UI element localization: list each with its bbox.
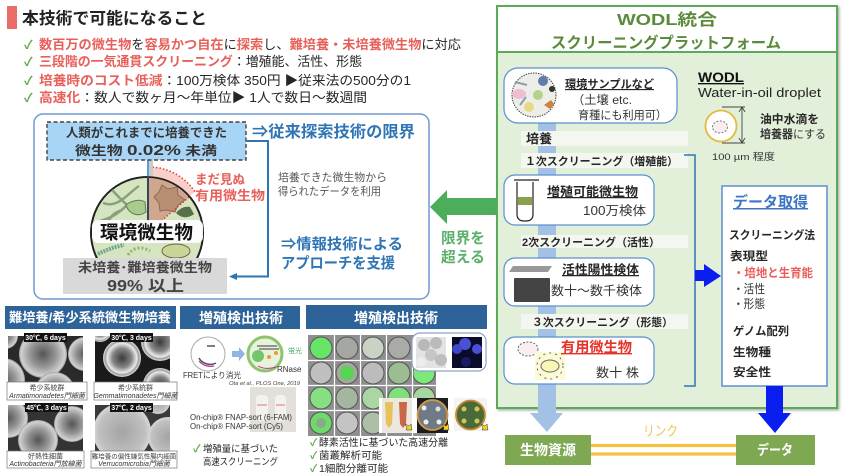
box: WODL definition: 培養器にする <box>760 127 826 141</box>
step label: culture: 培養 <box>526 131 553 146</box>
images: droplets bright field and fluorescence <box>412 333 486 371</box>
step label: primary screening: １次スクリーニング（増殖能） <box>525 154 678 168</box>
heading: limits of conventional technology: ⇒従来探索技術の限界 <box>252 122 415 141</box>
box: environmental samples: 育種にも利用可） <box>578 108 667 122</box>
arrow: flow to data <box>758 386 791 433</box>
photo: Verrucomicrobia colonies: 難培養の偏性嫌気性腸内細菌 <box>92 452 177 460</box>
heading: what this technology enables: 本技術で可能になること <box>22 8 207 28</box>
text block: growth-based screening: ✓ <box>193 443 201 455</box>
box: data acquisition: 生物種 <box>733 345 772 359</box>
arrow: data feedback loop <box>229 141 268 280</box>
arrow: flow to bio-resources <box>530 408 563 432</box>
text block: growth-based screening: 増殖量に基づいた <box>203 443 278 455</box>
box: data acquisition: 安全性 <box>733 365 772 379</box>
box: WODL definition: WODL <box>698 70 744 85</box>
connector line from cultured box to circle <box>148 160 153 222</box>
box: bio-resources: 生物資源 <box>520 442 576 458</box>
illustration: environmental microbes circle <box>90 166 204 258</box>
photo: Actinobacteria colonies: 好熱性細菌 <box>28 452 63 460</box>
photo: Gemmatimonadetes colonies: 30℃, 3 days <box>111 334 152 342</box>
photo: FNAP-sort reagent tubes: On-chip® FNAP-sort (Cy5) <box>190 422 283 431</box>
text block: enzyme activity separation features <box>310 436 448 473</box>
diagram: FRET probe quenching and RNase: Ota et al., PLOS One, 2019 <box>229 381 300 387</box>
box: data acquisition <box>722 186 827 386</box>
box: data acquisition: ゲノム配列 <box>733 324 789 338</box>
bracket: screening results to data <box>684 155 695 386</box>
callout: cultured microbes under 0.02%: 人類がこれまでに培養できた <box>66 125 227 140</box>
diagram: FRET probe quenching and RNase: RNase <box>277 365 302 374</box>
box: bio-resources <box>505 435 591 465</box>
text block: benefit checklist: 三段階の一気通貫スクリーニング：増殖能、活性、形態 <box>39 54 362 69</box>
callout: unseen useful microbes <box>195 172 265 203</box>
text block: benefit checklist: 培養時のコスト低減 ：100万検体 350円 ▶従来法の500分の1 <box>39 73 411 88</box>
box: data acquisition: 表現型 <box>730 249 768 263</box>
text block: growth-based screening: 高速スクリーニング <box>203 456 278 468</box>
photo: Gemmatimonadetes colonies <box>94 333 178 400</box>
callout: uncultured microbes 99%: 未培養･難培養微生物 <box>78 260 212 275</box>
box: activity-positive samples: 活性陽性検体 <box>562 262 639 277</box>
box: proliferating microbes: 100万検体 <box>583 204 647 218</box>
box: WODL definition: 油中水滴を <box>760 112 819 126</box>
callout: cultured microbes under 0.02% <box>47 122 246 160</box>
photo: Armatimonadetes colonies <box>6 333 88 400</box>
box: data: データ <box>757 442 793 458</box>
photo: Gemmatimonadetes colonies: 希少系統群 <box>118 383 153 392</box>
heading: supported by information technology <box>281 235 403 272</box>
box: data acquisition: ・活性 <box>733 282 765 296</box>
photo: FNAP-sort reagent tubes: On-chip® FNAP-sort (6-FAM) <box>190 413 292 422</box>
image grid: droplet fluorescence microscopy <box>308 335 436 436</box>
box: useful microbes: 有用微生物 <box>561 339 632 355</box>
text block: growth-based screening <box>193 443 278 468</box>
heading: platform title <box>551 11 781 52</box>
heading: platform title: スクリーニングプラットフォーム <box>551 33 781 52</box>
photo: Armatimonadetes colonies: 30℃, 6 days <box>25 334 66 342</box>
callout: cultured microbes under 0.02%: 微生物 0.02% 未満 <box>75 142 218 159</box>
box: data acquisition: データ取得 <box>733 193 808 211</box>
box: data acquisition: スクリーニング法 <box>729 228 815 242</box>
box: activity-positive samples: 数十～数千検体 <box>551 283 643 298</box>
panel: limits of conventional exploration <box>34 114 429 299</box>
box: data acquisition: ・培地と生育能 <box>733 265 813 280</box>
box: useful microbes: 数十 株 <box>596 365 640 380</box>
text block: enzyme activity separation features: 酵素活性に基づいた高速分離 <box>319 436 448 449</box>
diagram: FRET probe quenching and RNase: FRETにより消光 <box>183 370 241 380</box>
box: activity-positive samples <box>504 258 654 306</box>
photo: Actinobacteria colonies: 45℃, 3 days <box>26 404 67 412</box>
heading: supported by information technology: ⇒情報技術による <box>281 235 403 253</box>
heading bar: growth detection <box>180 306 300 329</box>
photo: Verrucomicrobia colonies: 37℃, 2 days <box>111 404 152 412</box>
box: useful microbes <box>504 337 654 384</box>
box: WODL definition: 100 µm 程度 <box>712 151 776 163</box>
photo: Armatimonadetes colonies: Armatimonadetes門細菌 <box>8 392 86 400</box>
photo: Gemmatimonadetes colonies: Gemmatimonadetes門細菌 <box>93 392 179 400</box>
text block: benefit checklist: ✓ <box>24 91 33 105</box>
text block: benefit checklist <box>24 37 461 105</box>
text block: enzyme activity separation features: 菌叢解析可能 <box>319 449 382 462</box>
callout: uncultured microbes 99% <box>63 258 227 295</box>
diagram: FRET probe quenching and RNase <box>183 337 302 387</box>
link lines between resources and data <box>591 423 736 454</box>
box: environmental samples: （土壌 etc. <box>572 93 632 107</box>
callout: uncultured microbes 99%: 99% 以上 <box>107 277 184 295</box>
box: data acquisition: ・形態 <box>733 297 765 311</box>
text block: benefit checklist: ✓ <box>24 55 33 69</box>
photo: Verrucomicrobia colonies: Verrucomicrobia門細菌 <box>98 460 171 468</box>
photo: Armatimonadetes colonies: 希少系統群 <box>30 383 64 392</box>
panel: WODL integrated screening platform <box>497 6 837 408</box>
text block: using data from cultured microbes <box>278 170 387 198</box>
heading bar: growth detection: 増殖検出技術 <box>199 310 283 326</box>
text block: benefit checklist: 高速化：数人で数ヶ月～年単位▶ 1人で数日～数週間 <box>39 90 367 105</box>
callout: unseen useful microbes: 有用微生物 <box>195 188 265 203</box>
box: WODL definition: Water-in-oil droplet <box>698 86 822 100</box>
photos: tubes and culture dishes <box>379 398 490 433</box>
step label: culture <box>521 131 688 146</box>
box: WODL definition <box>698 70 826 163</box>
text block: enzyme activity separation features: ✓ <box>310 451 318 462</box>
step label: tertiary screening: ３次スクリーニング（形態） <box>532 315 673 329</box>
link lines between resources and data: リンク <box>643 423 678 439</box>
photo: Actinobacteria colonies: Actinobacteria門放線菌 <box>8 460 83 468</box>
box: environmental samples: 環境サンプルなど <box>565 77 654 91</box>
box: data <box>736 435 815 465</box>
flow bar behind the steps <box>538 123 556 408</box>
photo: FNAP-sort reagent tubes <box>190 387 296 432</box>
text block: benefit checklist: ✓ <box>24 38 33 52</box>
step label: secondary screening: 2次スクリーニング（活性） <box>522 235 660 249</box>
arrow: beyond the limits <box>430 190 497 224</box>
step label: tertiary screening <box>521 314 688 329</box>
text block: benefit checklist: 数百万の微生物を容易かつ自在に探索し、難培養・未培養微生物に対応 <box>39 37 461 52</box>
text block: using data from cultured microbes: 得られたデータを利用 <box>278 184 381 198</box>
arrow: to data acquisition <box>695 264 721 287</box>
heading bar: rare lineage culture <box>5 306 176 329</box>
label: beyond the limits: 限界を <box>441 230 485 247</box>
box: proliferating microbes <box>504 175 654 225</box>
heading bar: growth detection second <box>306 305 487 329</box>
icon: droplet with dimension arrows <box>706 107 745 143</box>
label: environmental microbes: 環境微生物 <box>100 222 193 243</box>
photo: Actinobacteria colonies <box>6 403 84 468</box>
text block: using data from cultured microbes: 培養できた微生物から <box>278 170 387 184</box>
text block: enzyme activity separation features: ✓ <box>310 438 318 449</box>
diagram: FRET probe quenching and RNase: 蛍光 <box>288 346 302 355</box>
heading: platform title: WODL統合 <box>617 11 717 29</box>
heading bar: growth detection second: 増殖検出技術 <box>354 310 438 326</box>
callout: unseen useful microbes: まだ見ぬ <box>195 172 245 187</box>
box: proliferating microbes: 増殖可能微生物 <box>547 184 639 199</box>
box: environmental samples <box>504 68 677 123</box>
heading bar: rare lineage culture: 難培養/希少系統微生物培養 <box>9 310 171 325</box>
label: beyond the limits: 超える <box>441 248 485 266</box>
label: beyond the limits <box>441 230 485 266</box>
text block: benefit checklist: ✓ <box>24 74 33 88</box>
heading: supported by information technology: アプローチを支援 <box>281 255 395 272</box>
photo: Verrucomicrobia colonies <box>90 403 178 468</box>
